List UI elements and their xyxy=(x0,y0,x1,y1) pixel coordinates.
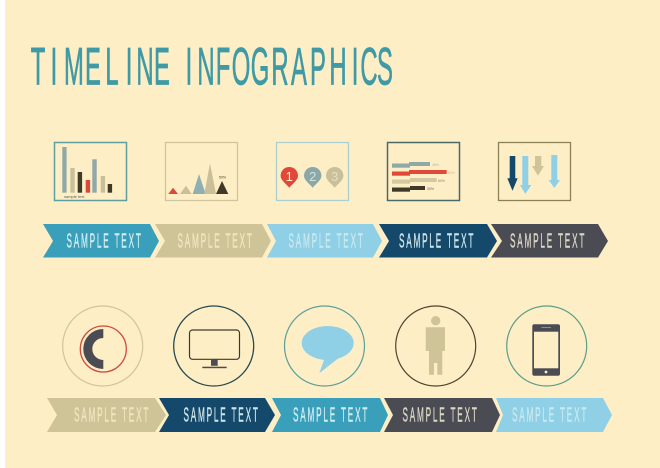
icon: person in circle xyxy=(396,306,476,386)
ribbon: light blue xyxy=(496,398,612,432)
ribbon: light blue xyxy=(267,224,382,258)
ribbon: teal xyxy=(43,224,159,258)
ribbon: tan: SAMPLE TEXT xyxy=(178,230,254,253)
ribbon: tan xyxy=(155,224,271,258)
ribbon: teal: SAMPLE TEXT xyxy=(293,404,369,427)
ribbon: charcoal: SAMPLE TEXT xyxy=(402,404,479,427)
icon: monitor in circle xyxy=(174,306,254,386)
panel: horizontal bars icon: 60% xyxy=(438,179,445,183)
ribbon: charcoal: SAMPLE TEXT xyxy=(510,230,586,253)
ribbon: navy xyxy=(379,224,497,258)
title: TIMELINE INFOGRAPHICS xyxy=(31,37,393,96)
ribbon: charcoal xyxy=(491,224,608,258)
icon: phone in circle xyxy=(507,306,587,386)
ribbon: teal: SAMPLE TEXT xyxy=(66,230,143,253)
panel: horizontal bars icon: 30% xyxy=(427,187,434,191)
ribbon: tan xyxy=(47,398,166,432)
icon: half ring in circle xyxy=(63,306,143,386)
panel: numbered pins icon: 1 xyxy=(286,169,293,184)
ribbon: light blue: SAMPLE TEXT xyxy=(512,404,588,427)
panel: bar chart icon xyxy=(54,142,126,200)
panel: horizontal bars icon xyxy=(388,142,460,200)
ribbon: navy: SAMPLE TEXT xyxy=(184,404,260,427)
ribbon: navy: SAMPLE TEXT xyxy=(399,230,475,253)
panel: numbered pins icon: 3 xyxy=(331,169,338,184)
panel: numbered pins icon: 2 xyxy=(309,169,316,184)
panel: mountain chart icon xyxy=(166,142,238,200)
ribbon: light blue: SAMPLE TEXT xyxy=(288,230,365,253)
panel: bar chart icon: sample text xyxy=(64,194,85,199)
ribbon: navy xyxy=(159,398,275,432)
ribbon row 2 xyxy=(47,398,612,432)
panel: horizontal bars icon: 80% xyxy=(448,171,455,175)
panel: arrows icon xyxy=(498,142,570,200)
panel: numbered pins icon xyxy=(276,142,348,200)
ribbon row 1 xyxy=(43,224,608,258)
icon: speech bubble in circle xyxy=(284,306,364,386)
panel: mountain chart icon: 50% xyxy=(219,176,226,180)
panel: horizontal bars icon: 45% xyxy=(432,163,439,167)
ribbon: charcoal xyxy=(384,398,500,432)
ribbon: teal xyxy=(272,398,388,432)
ribbon: tan: SAMPLE TEXT xyxy=(74,404,150,427)
